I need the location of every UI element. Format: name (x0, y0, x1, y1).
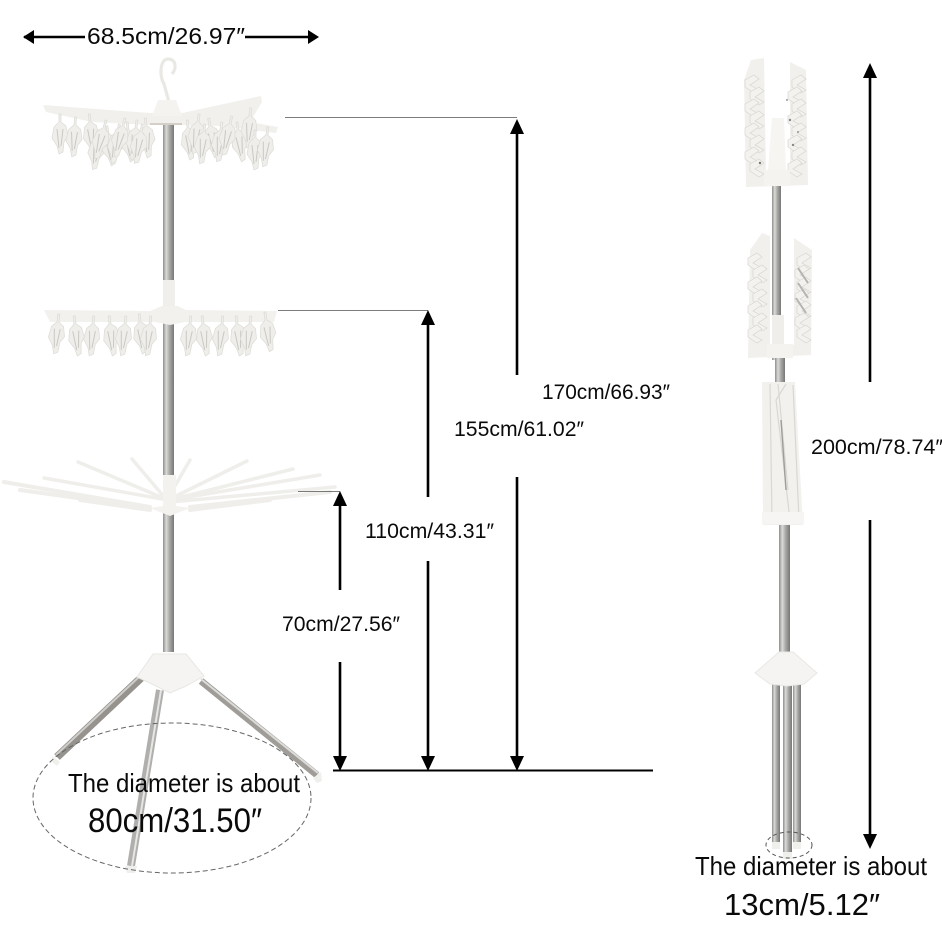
left rack: open drying rack (4, 59, 335, 873)
dimension: 70cm (282, 491, 400, 771)
diameter label, right (695, 851, 928, 922)
dimension: 70cm: 70cm/27.56″ (282, 612, 400, 636)
hook (161, 59, 175, 102)
folded middle tier (748, 233, 812, 358)
dimension: 200cm: 200cm/78.74″ (811, 435, 942, 459)
right rack: folded drying rack (744, 58, 817, 859)
folded bottom tier (762, 382, 804, 525)
diameter label, right: 13cm/5.12″ (724, 887, 880, 922)
dimension: 170cm: 170cm/66.93″ (542, 380, 670, 404)
diameter label, left (68, 768, 301, 840)
folded top tier (744, 58, 808, 187)
width dimension: 68.5cm/26.97: 68.5cm/26.97″ (87, 23, 245, 49)
diameter label, left: 80cm/31.50″ (88, 802, 262, 840)
width dimension: 68.5cm/26.97 (23, 23, 319, 49)
bottom tier spokes (4, 459, 335, 516)
tripod hub (137, 654, 204, 693)
diameter label, right: The diameter is about (695, 851, 928, 881)
diameter label, left: The diameter is about (68, 768, 301, 798)
baseline (333, 770, 653, 772)
folded hub (755, 652, 817, 686)
middle tier collar, arms and clips (44, 280, 278, 357)
folded rack pole (772, 185, 790, 655)
tripod legs (52, 676, 322, 873)
diameter ellipse, left (33, 723, 311, 873)
dimension: 170cm (510, 119, 670, 771)
dimension: 200cm (811, 63, 942, 849)
top tier arms and clips (43, 96, 278, 171)
left rack centre pole (163, 122, 174, 652)
folded legs (772, 682, 801, 859)
height guide lines (278, 118, 517, 492)
diameter ellipse, right (766, 832, 812, 858)
dimension: 155cm (421, 310, 584, 771)
dimension: 110cm: 110cm/43.31″ (365, 519, 494, 543)
dimension: 155cm: 155cm/61.02″ (454, 417, 584, 441)
